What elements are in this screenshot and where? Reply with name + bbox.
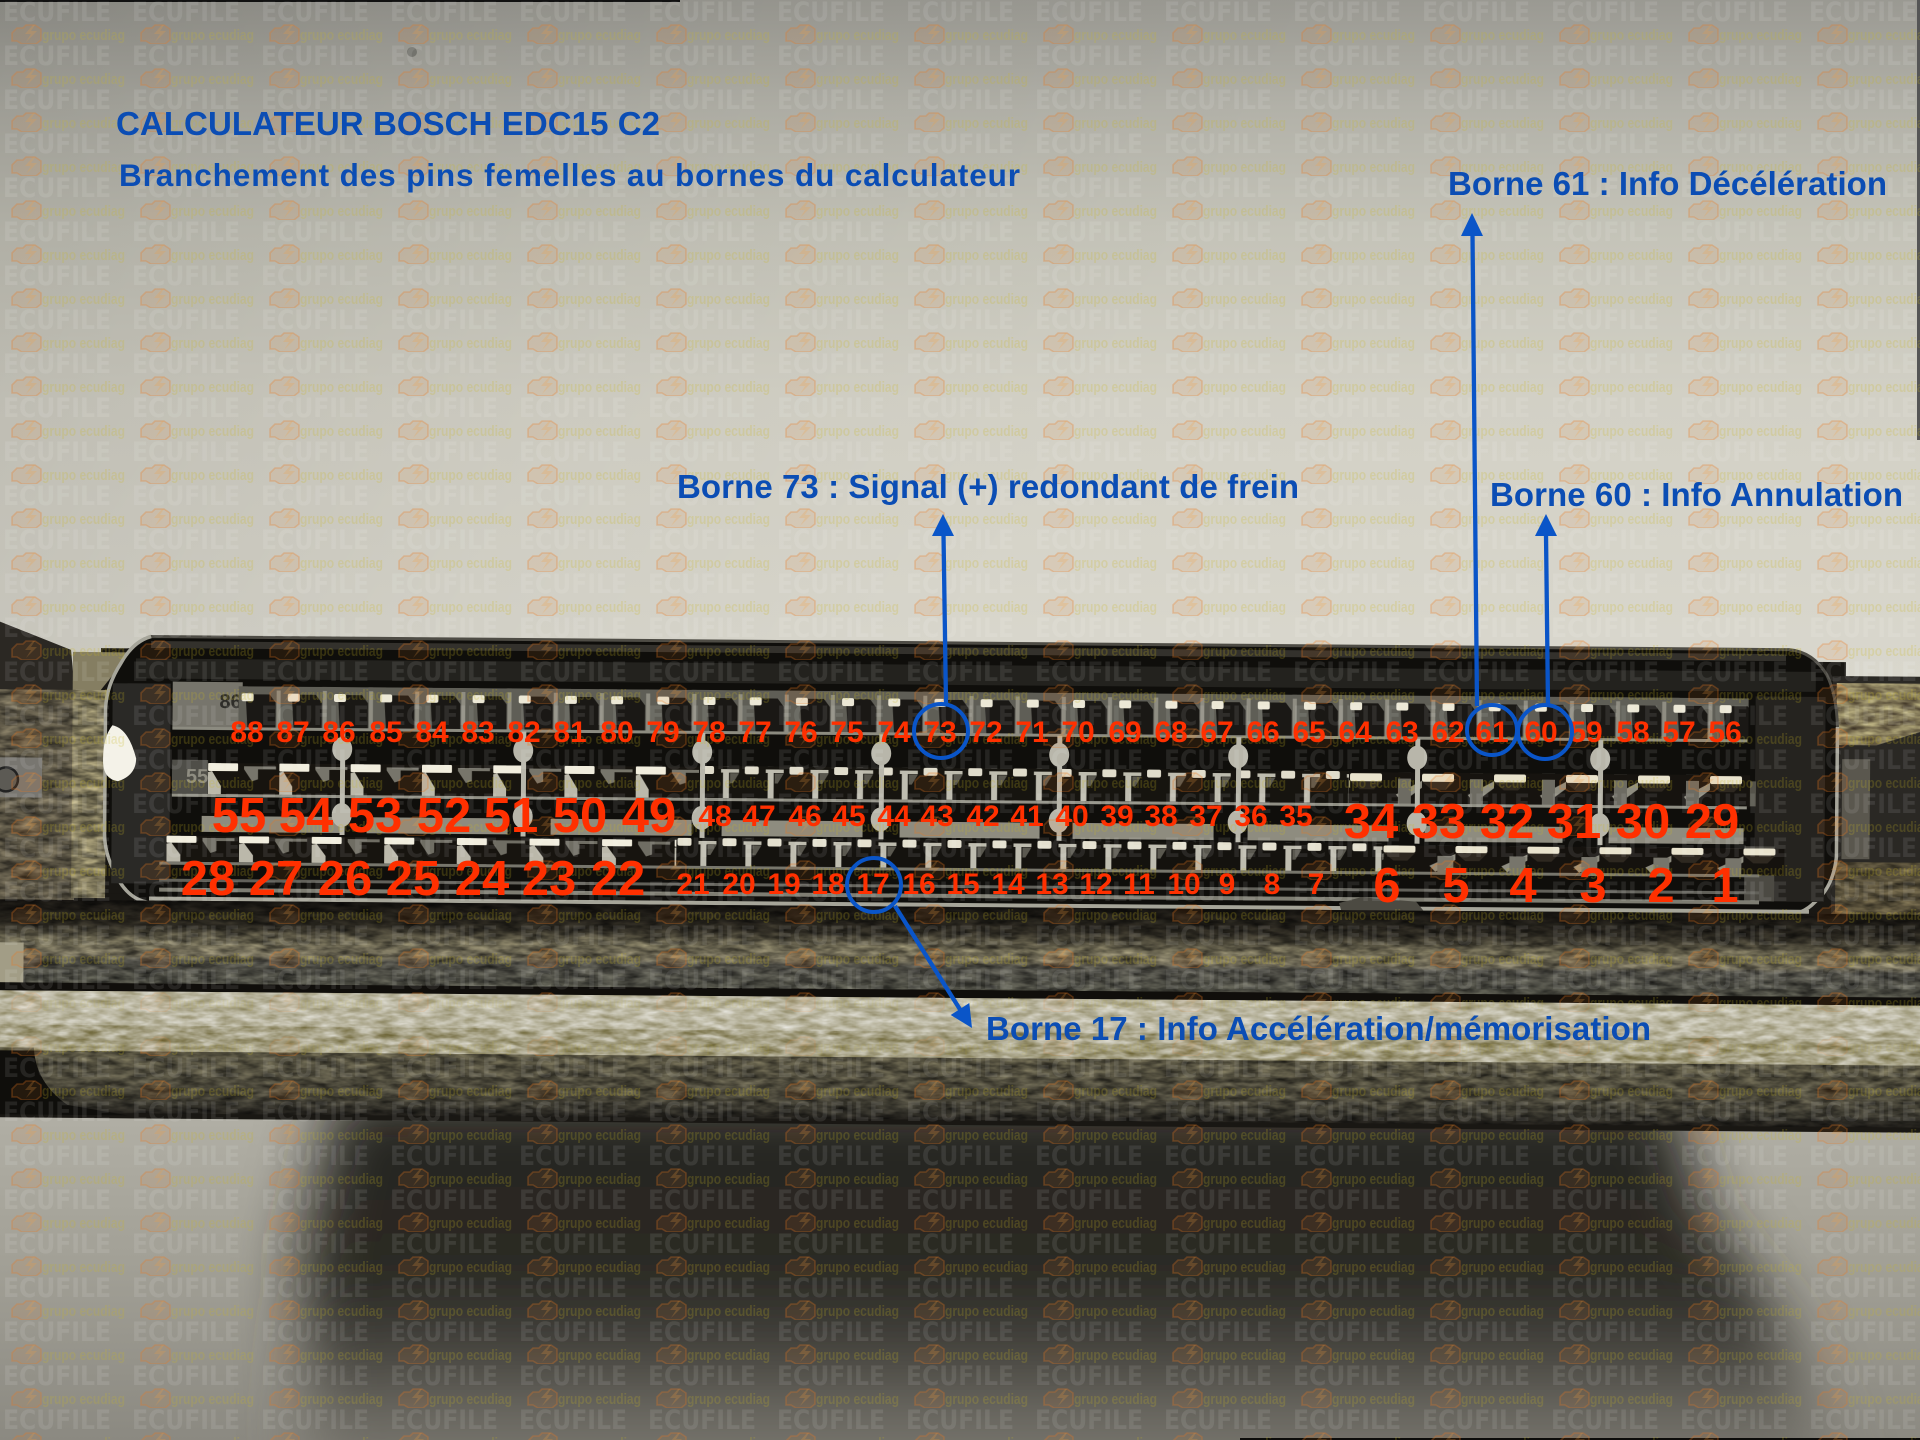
pin numbers: row 3 right, large (6 to 1): 3	[1579, 859, 1607, 913]
calculator body and connector	[0, 614, 1920, 1133]
pin numbers: row 2 middle (48 to 35): 39	[1100, 800, 1134, 833]
pin numbers: row 2 middle (48 to 35): 38	[1144, 800, 1178, 833]
pin numbers: row 1 (88 to 56): 59	[1569, 716, 1603, 749]
pin numbers: row 2 left, large (55 to 49): 55	[212, 789, 266, 843]
pin numbers: row 3 left, large (28 to 22)	[181, 852, 645, 906]
pin numbers: row 1 (88 to 56): 72	[969, 716, 1003, 749]
pin numbers: row 3 middle (21 to 7): 17	[856, 868, 890, 901]
arrow: pin 60 to label	[1535, 514, 1557, 706]
pin numbers: row 1 (88 to 56): 58	[1616, 716, 1650, 749]
inner side walls	[111, 683, 1826, 902]
pin numbers: row 3 right, large (6 to 1): 5	[1442, 859, 1470, 913]
background: light wall behind the calculator	[0, 0, 1920, 720]
pin numbers: row 1 (88 to 56): 71	[1015, 716, 1049, 749]
pin numbers: row 2 middle (48 to 35): 46	[788, 800, 822, 833]
background: floor and shadow below the calculator	[0, 1090, 1920, 1440]
pin numbers: row 1 (88 to 56): 74	[877, 716, 911, 749]
pin numbers: row 2 middle (48 to 35): 36	[1234, 800, 1268, 833]
callout: borne 17: Borne 17 : Info Accélération/mémorisation	[986, 1010, 1651, 1047]
pin numbers: row 2 right, large (34 to 29)	[1344, 795, 1739, 849]
pin numbers: row 1 (88 to 56): 67	[1200, 716, 1234, 749]
pin numbers: row 2 middle (48 to 35): 41	[1010, 800, 1044, 833]
pin numbers: row 3 right, large (6 to 1)	[1373, 859, 1739, 913]
locating lugs	[332, 730, 1610, 845]
pin numbers: row 3 left, large (28 to 22): 25	[386, 852, 440, 906]
arrow: pin 17 to label	[895, 906, 972, 1028]
pin numbers: row 3 right, large (6 to 1): 4	[1509, 859, 1537, 913]
pin numbers: row 1 (88 to 56): 80	[600, 716, 634, 749]
pin numbers: row 1 (88 to 56): 76	[784, 716, 818, 749]
pin numbers: row 1 (88 to 56): 88	[230, 716, 264, 749]
row 2 pins: 55	[186, 766, 208, 788]
pin numbers: row 1 (88 to 56): 61	[1475, 716, 1509, 749]
pin numbers: row 2 left, large (55 to 49): 51	[484, 789, 538, 843]
callout: borne 73: Borne 73 : Signal (+) redondant de frein	[677, 468, 1299, 505]
pin numbers: row 3 right, large (6 to 1): 1	[1711, 859, 1739, 913]
pin numbers: row 1 (88 to 56): 57	[1662, 716, 1696, 749]
row 1 plate and pins: 86	[219, 691, 242, 713]
pin numbers: row 3 middle (21 to 7): 12	[1079, 868, 1113, 901]
pin numbers: row 1 (88 to 56): 70	[1061, 716, 1095, 749]
pin numbers: row 1 (88 to 56): 62	[1431, 716, 1465, 749]
pin numbers: row 1 (88 to 56): 66	[1246, 716, 1280, 749]
pin numbers: row 3 middle (21 to 7): 15	[946, 868, 980, 901]
pin numbers: row 1 (88 to 56): 77	[738, 716, 772, 749]
pin numbers: row 3 left, large (28 to 22): 28	[181, 852, 235, 906]
pin numbers: row 3 middle (21 to 7): 21	[676, 868, 710, 901]
pin numbers: row 3 middle (21 to 7): 10	[1167, 868, 1201, 901]
pin numbers: row 2 right, large (34 to 29): 31	[1547, 795, 1601, 849]
callout: borne 61: Borne 61 : Info Décélération	[1448, 165, 1887, 202]
subtitle: Branchement des pins femelles au bornes du calculateur	[119, 157, 1020, 193]
left mounting lug	[0, 614, 131, 903]
pin numbers: row 2 left, large (55 to 49): 53	[348, 789, 402, 843]
metal strip	[0, 990, 1920, 1066]
callout: borne 60: Borne 60 : Info Annulation	[1490, 476, 1903, 513]
connector frame	[104, 636, 1838, 916]
pin numbers: row 2 right, large (34 to 29): 34	[1344, 795, 1398, 849]
pin numbers: row 2 middle (48 to 35): 42	[966, 800, 1000, 833]
pin numbers: row 3 right, large (6 to 1): 6	[1373, 859, 1401, 913]
pin numbers: row 1 (88 to 56): 86	[322, 716, 356, 749]
pin numbers: row 2 left, large (55 to 49): 50	[553, 789, 607, 843]
pin numbers: row 3 middle (21 to 7): 16	[902, 868, 936, 901]
pin numbers: row 1 (88 to 56): 69	[1108, 716, 1142, 749]
metal strip highlight over the watermark	[0, 990, 1920, 1066]
row 2 lower plates	[202, 816, 1744, 844]
row 2 pins	[172, 760, 1750, 809]
pin numbers: row 1 (88 to 56): 64	[1338, 716, 1372, 749]
row 3 pins	[149, 833, 1809, 923]
arrow: pin 73 to label	[932, 514, 954, 704]
pin numbers: row 2 middle (48 to 35): 43	[920, 800, 954, 833]
pin numbers: row 3 middle (21 to 7): 11	[1123, 868, 1155, 901]
housing base	[0, 647, 1920, 1133]
pin numbers: row 3 left, large (28 to 22): 23	[522, 852, 576, 906]
pin numbers: row 3 middle (21 to 7): 18	[811, 868, 845, 901]
pin numbers: row 2 middle (48 to 35)	[698, 800, 1313, 833]
pin numbers: row 3 left, large (28 to 22): 26	[318, 852, 372, 906]
pin numbers: row 1 (88 to 56): 81	[553, 716, 587, 749]
pin numbers: row 1 (88 to 56): 63	[1385, 716, 1419, 749]
pin numbers: row 2 middle (48 to 35): 48	[698, 800, 732, 833]
pin numbers: row 1 (88 to 56): 75	[830, 716, 864, 749]
pin numbers: row 1 (88 to 56): 87	[276, 716, 310, 749]
lower bevel	[0, 1047, 1920, 1130]
pin numbers: row 2 middle (48 to 35): 35	[1279, 800, 1313, 833]
pin numbers: row 2 middle (48 to 35): 45	[832, 800, 866, 833]
pin numbers: row 3 middle (21 to 7): 19	[767, 868, 801, 901]
pin numbers: row 2 left, large (55 to 49)	[212, 789, 676, 843]
pin numbers: row 3 left, large (28 to 22): 22	[591, 852, 645, 906]
circle: pin 17	[847, 858, 901, 912]
pin numbers: row 2 left, large (55 to 49): 54	[279, 789, 333, 843]
pin numbers: row 1 (88 to 56): 78	[692, 716, 726, 749]
pin numbers: row 1 (88 to 56): 84	[415, 716, 449, 749]
pin numbers: row 1 (88 to 56): 82	[507, 716, 541, 749]
pin numbers: row 3 middle (21 to 7): 13	[1035, 868, 1069, 901]
circle: pin 73	[914, 704, 968, 758]
pin numbers: row 1 (88 to 56)	[230, 716, 1742, 749]
pin numbers: row 2 middle (48 to 35): 47	[742, 800, 776, 833]
pin numbers: row 3 middle (21 to 7)	[676, 868, 1324, 901]
pin numbers: row 2 middle (48 to 35): 44	[877, 800, 911, 833]
pin numbers: row 2 middle (48 to 35): 40	[1055, 800, 1089, 833]
pin numbers: row 1 (88 to 56): 68	[1154, 716, 1188, 749]
pin numbers: row 1 (88 to 56): 83	[461, 716, 495, 749]
pin numbers: row 1 (88 to 56): 60	[1524, 716, 1558, 749]
pin numbers: row 2 middle (48 to 35): 37	[1189, 800, 1223, 833]
pin numbers: row 3 middle (21 to 7): 7	[1308, 868, 1324, 901]
pin numbers: row 3 middle (21 to 7): 20	[722, 868, 756, 901]
pin numbers: row 1 (88 to 56): 73	[923, 716, 957, 749]
pin numbers: row 1 (88 to 56): 85	[369, 716, 403, 749]
pin numbers: row 3 middle (21 to 7): 8	[1264, 868, 1280, 901]
pin numbers: row 3 middle (21 to 7): 9	[1219, 868, 1235, 901]
arrow: pin 61 to label	[1461, 213, 1483, 706]
pin numbers: row 2 right, large (34 to 29): 29	[1685, 795, 1739, 849]
pin numbers: row 2 left, large (55 to 49): 49	[622, 789, 676, 843]
pin numbers: row 3 left, large (28 to 22): 24	[455, 852, 509, 906]
right mounting lug	[1831, 676, 1920, 930]
pin numbers: row 2 right, large (34 to 29): 33	[1412, 795, 1466, 849]
circle: pin 60	[1518, 705, 1572, 759]
pin numbers: row 3 middle (21 to 7): 14	[991, 868, 1025, 901]
white key mark	[103, 725, 136, 781]
pin numbers: row 3 left, large (28 to 22): 27	[249, 852, 303, 906]
pin numbers: row 3 right, large (6 to 1): 2	[1647, 859, 1675, 913]
lower body flange	[0, 899, 1920, 1006]
circle: pin 61	[1467, 705, 1517, 755]
pin numbers: row 1 (88 to 56): 56	[1708, 716, 1742, 749]
pin numbers: row 1 (88 to 56): 65	[1292, 716, 1326, 749]
title: CALCULATEUR BOSCH EDC15 C2	[116, 105, 660, 142]
pin numbers: row 2 left, large (55 to 49): 52	[417, 789, 471, 843]
pin numbers: row 1 (88 to 56): 79	[646, 716, 680, 749]
pin numbers: row 2 right, large (34 to 29): 32	[1480, 795, 1534, 849]
row 1 plate and pins	[172, 682, 1749, 742]
pin numbers: row 2 right, large (34 to 29): 30	[1616, 795, 1670, 849]
